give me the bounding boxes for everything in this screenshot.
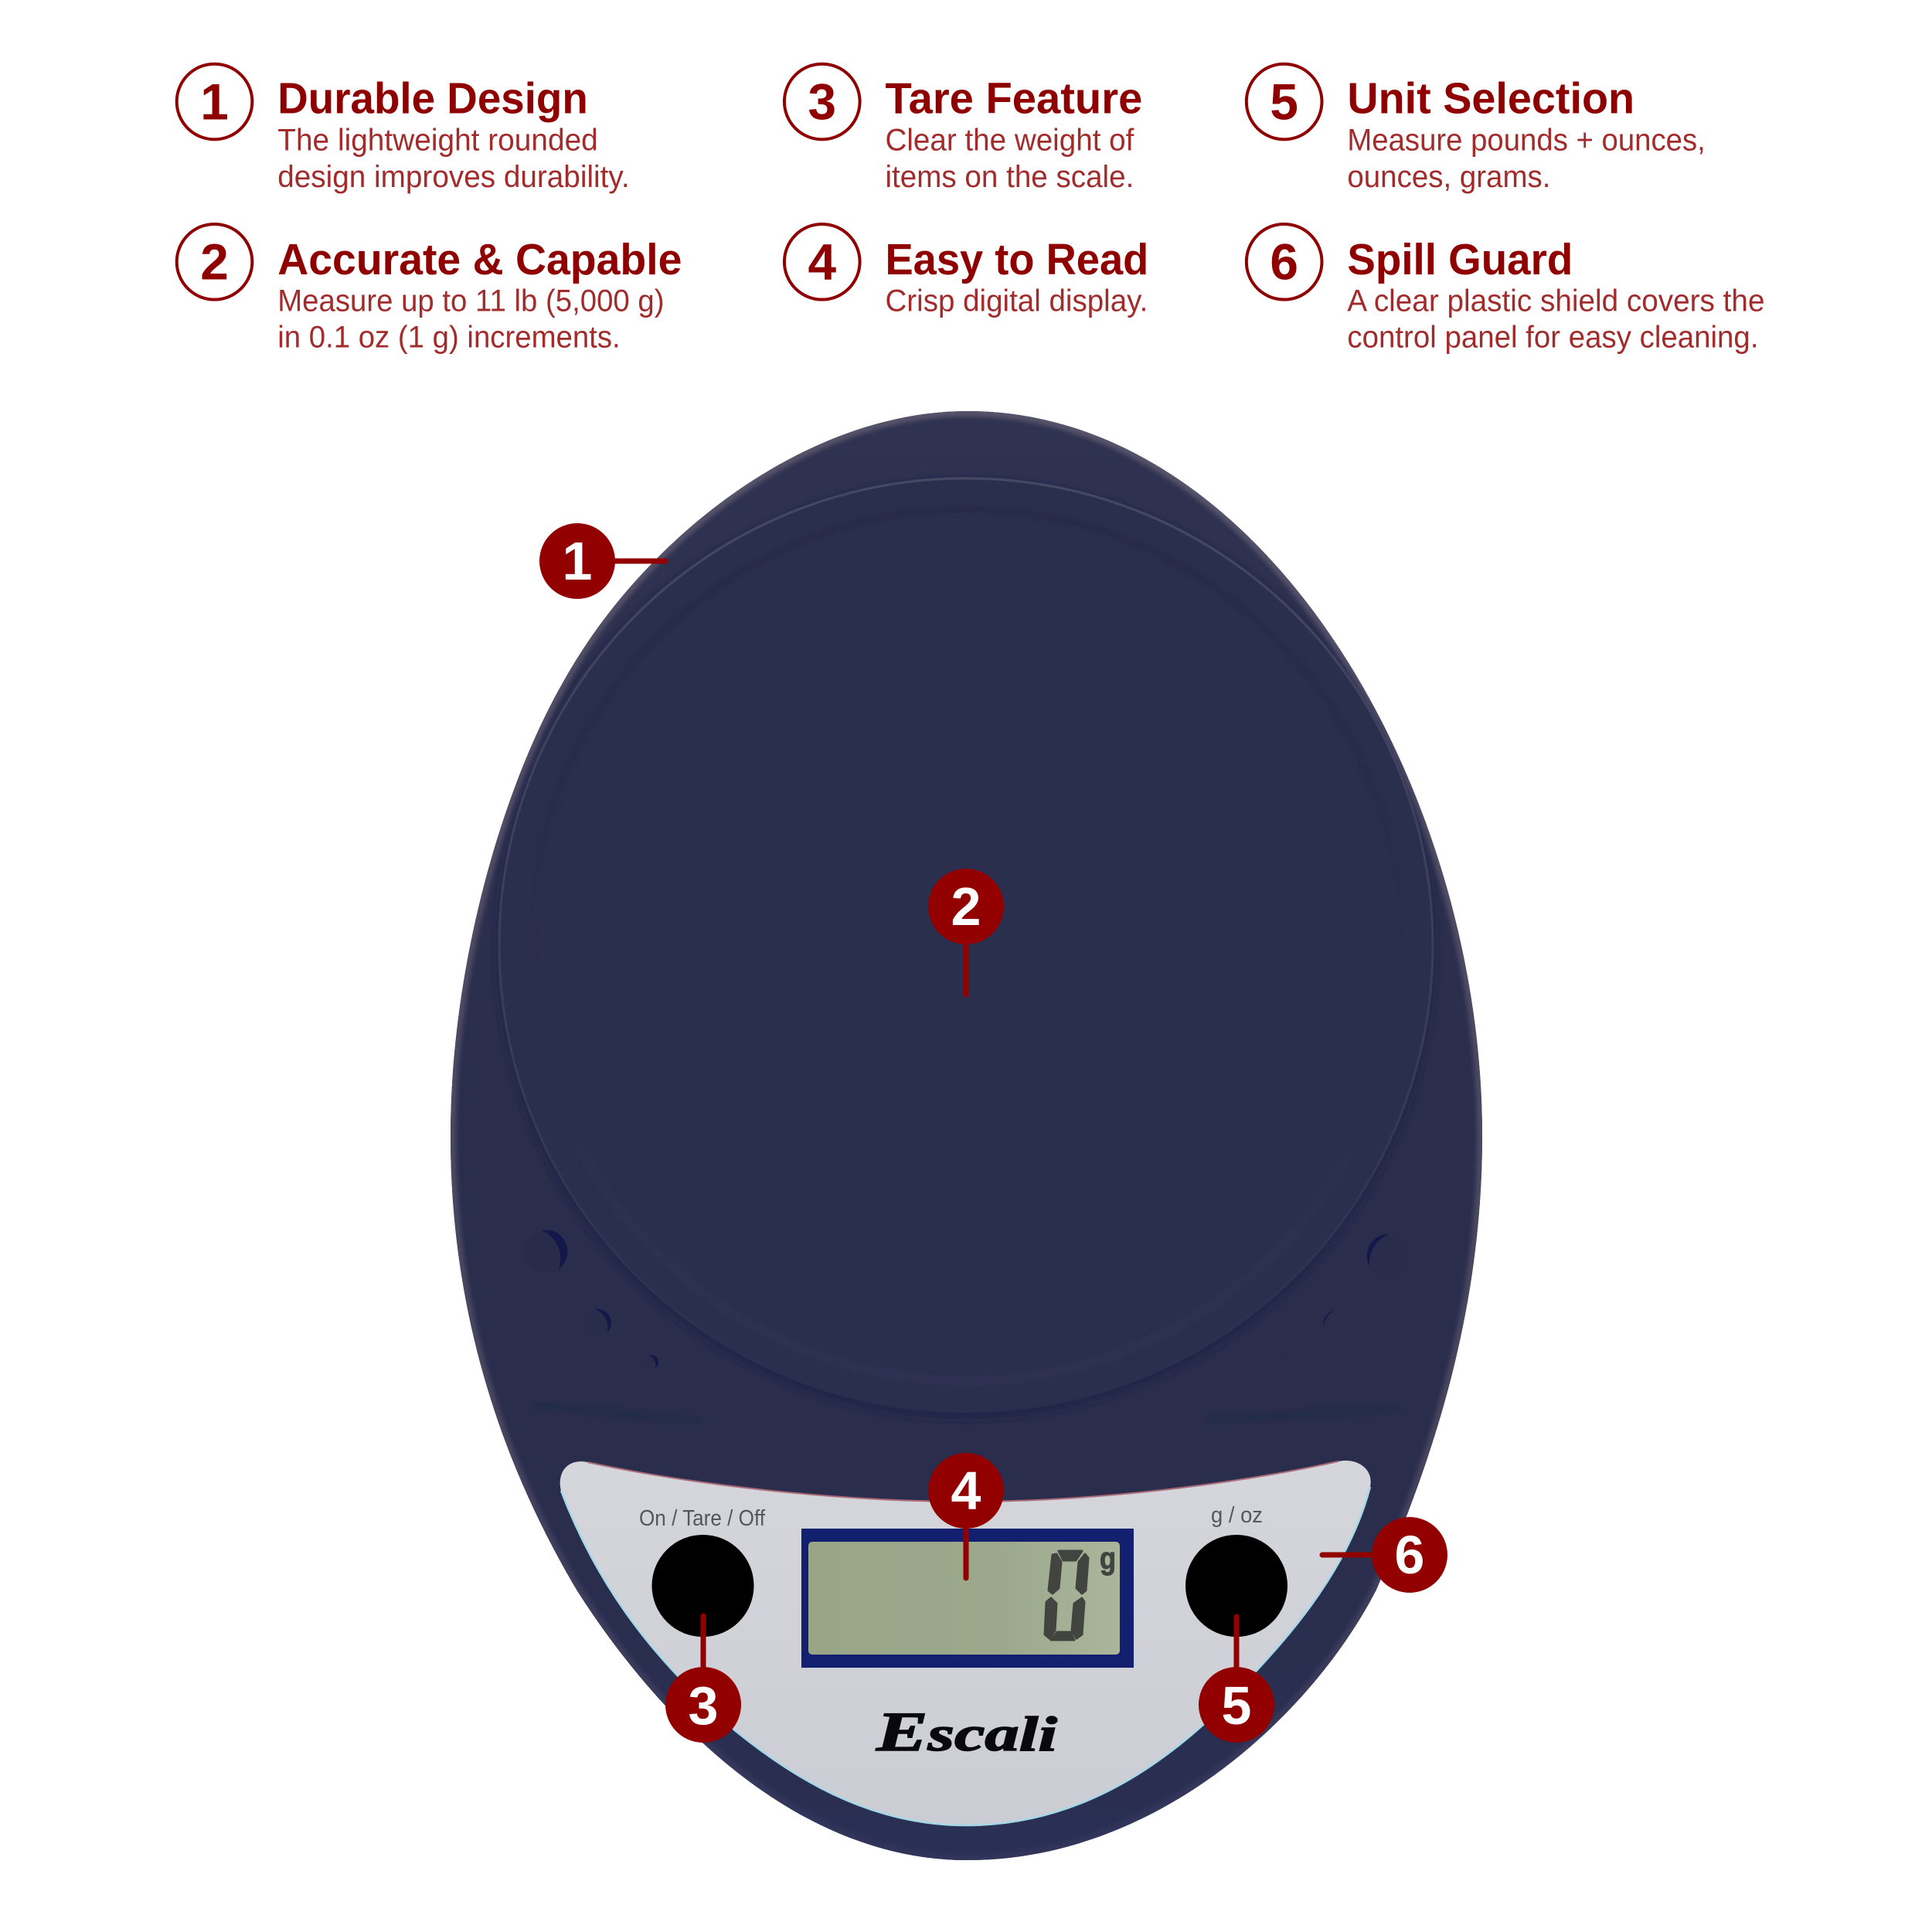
feature 2: accurate and capable: in 0.1 oz (1 g) increments.	[277, 320, 621, 354]
on tare off button	[652, 1535, 754, 1637]
feature 6: spill guard: Spill Guard	[1347, 236, 1573, 284]
feature 5: unit selection: 5	[1270, 73, 1298, 130]
feature 5: unit selection: ounces, grams.	[1347, 160, 1550, 194]
callout 4	[928, 1453, 1004, 1578]
feature 4: easy to read: 4	[808, 233, 836, 291]
feature 3: tare feature: items on the scale.	[885, 160, 1134, 194]
callout 5: 5	[1222, 1675, 1251, 1736]
features legend	[177, 64, 1764, 354]
callout 4: 4	[951, 1461, 981, 1521]
callout 2	[928, 869, 1004, 995]
feature 3: tare feature: 3	[808, 73, 836, 130]
scale body	[451, 411, 1482, 1860]
weighing platter	[499, 478, 1433, 1412]
feature 2: accurate and capable: Accurate & Capable	[277, 236, 682, 284]
feature 6: spill guard: control panel for easy cleaning.	[1347, 320, 1759, 354]
callout markers	[539, 523, 1447, 1743]
dimples left	[524, 1230, 658, 1369]
feature 1: durable design: The lightweight rounded	[277, 123, 598, 157]
on tare off label: On / Tare / Off	[639, 1506, 766, 1531]
units button	[1185, 1535, 1287, 1637]
callout 1	[539, 523, 665, 599]
callout 3: 3	[689, 1675, 718, 1736]
lcd display	[801, 1529, 1134, 1668]
kitchen scale illustration	[451, 411, 1482, 1860]
feature 1: durable design	[177, 64, 630, 194]
units label: g / oz	[1211, 1503, 1263, 1528]
feature 1: durable design: 1	[200, 73, 229, 130]
callout 6	[1322, 1517, 1447, 1593]
feature 4: easy to read: Easy to Read	[885, 236, 1148, 284]
platter shadow	[498, 624, 1434, 1417]
feature 6: spill guard: A clear plastic shield covers the	[1347, 284, 1764, 318]
feature 6: spill guard: 6	[1270, 233, 1298, 291]
feature 3: tare feature	[784, 64, 1142, 194]
feature 4: easy to read: Crisp digital display.	[885, 284, 1148, 318]
feature 2: accurate and capable: Measure up to 11 lb (5,000 g)	[277, 284, 664, 318]
escali logo: E scali	[876, 1701, 1057, 1763]
feature 5: unit selection: Measure pounds + ounces,	[1347, 123, 1706, 157]
feature 2: accurate and capable	[177, 224, 682, 354]
callout 3	[665, 1616, 741, 1743]
feature 3: tare feature: Tare Feature	[885, 74, 1142, 123]
feature 5: unit selection: Unit Selection	[1347, 74, 1634, 123]
callout 6: 6	[1395, 1525, 1424, 1585]
feature 1: durable design: Durable Design	[277, 74, 588, 123]
feature 2: accurate and capable: 2	[200, 233, 229, 291]
body ridge details	[536, 1404, 1399, 1423]
callout 1: 1	[563, 531, 592, 591]
feature 4: easy to read	[784, 224, 1148, 318]
feature 3: tare feature: Clear the weight of	[885, 123, 1134, 157]
callout 2: 2	[951, 876, 981, 937]
feature 1: durable design: design improves durability.	[277, 160, 630, 194]
control panel	[560, 1461, 1371, 1825]
lcd unit g: g	[1100, 1542, 1116, 1576]
callout 5	[1199, 1617, 1274, 1743]
lcd zero digit	[1045, 1551, 1088, 1640]
feature 5: unit selection	[1247, 64, 1706, 194]
body soft edge highlight	[451, 411, 1482, 1860]
feature 6: spill guard	[1247, 224, 1764, 354]
dimples right	[1277, 1233, 1409, 1369]
